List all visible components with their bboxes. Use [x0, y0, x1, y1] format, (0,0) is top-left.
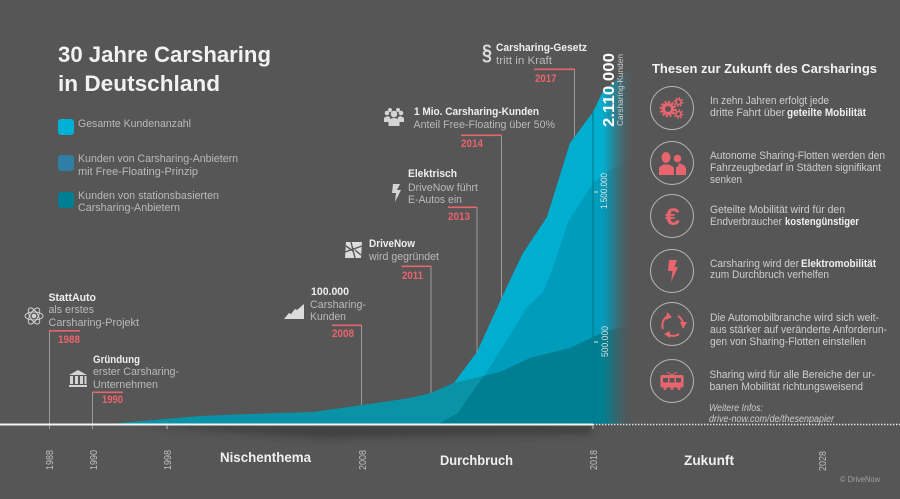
- axis years: [45, 450, 829, 471]
- y axis value: 1.500.000: 1.500.000: [599, 173, 609, 209]
- fade into future: [602, 50, 632, 425]
- event 1988: StattAuto: [48, 292, 96, 304]
- title: [58, 42, 271, 96]
- legend: free-floating customers: [58, 153, 238, 178]
- icon: train: [660, 372, 684, 390]
- thesis 3: Endverbraucher: [710, 216, 782, 228]
- area: station-based customers: [110, 325, 645, 424]
- event 2008: [284, 286, 366, 340]
- area: free-floating customers: [438, 155, 645, 424]
- y axis value: total: Carsharing-Kunden: [615, 54, 625, 126]
- event 2017: 2017: [535, 73, 556, 85]
- copyright: © DriveNow: [840, 475, 880, 484]
- legend: free-floating customers: Kunden von Carsharing-Anbietern: [78, 153, 238, 165]
- thesis 3: Geteilte Mobilität wird für den: [710, 204, 845, 216]
- event 1988: Carsharing-Projekt: [48, 317, 139, 329]
- thesis 1: [650, 86, 866, 130]
- legend: [58, 118, 238, 214]
- axis years: 2008: [358, 450, 369, 470]
- event 2017: tritt in Kraft: [496, 55, 552, 67]
- icon: atom: [25, 306, 43, 326]
- legend: total customers: Gesamte Kundenanzahl: [78, 118, 191, 130]
- thesis 2: [650, 142, 885, 186]
- area: station-based overlap: [440, 328, 617, 424]
- area chart: [116, 72, 628, 424]
- event 1990: [69, 354, 179, 406]
- event 2013: Elektrisch: [408, 168, 457, 180]
- thesis 1: geteilte Mobilität: [787, 107, 866, 119]
- event 2014: [384, 106, 555, 150]
- event 2011: [345, 238, 439, 282]
- axis years: 1998: [163, 450, 174, 470]
- thesis 2: Autonome Sharing-Flotten werden den: [710, 150, 885, 162]
- y axis value: 500.000: [594, 326, 610, 357]
- event 2008: 100.000: [311, 286, 349, 298]
- theses panel: [650, 61, 887, 425]
- icon: circular arrows: [662, 312, 687, 338]
- event 2011: DriveNow: [369, 238, 415, 250]
- thesis 6: banen Mobilität richtungsweisend: [710, 381, 863, 393]
- thesis 4: Carsharing wird der: [710, 258, 799, 270]
- event 2008: 2008: [332, 328, 354, 340]
- thesis 3: [650, 194, 860, 238]
- phase labels: Durchbruch: [440, 452, 513, 468]
- axis years: 1988: [45, 450, 56, 470]
- event 2014: Anteil Free-Floating über 50%: [414, 119, 555, 131]
- axis line: [0, 424, 900, 429]
- thesis 5: aus stärker auf veränderte Anforderun-: [710, 324, 887, 336]
- icon: growth mountains: [284, 304, 304, 319]
- icon: lightning bolt: [392, 184, 401, 202]
- legend: station-based customers: [58, 190, 219, 214]
- event 1990: Unternehmen: [93, 379, 158, 391]
- y axis value: total: 2.110.000: [601, 53, 618, 127]
- further info link: Weitere Infos:: [709, 403, 763, 414]
- thesis 4: [650, 250, 876, 292]
- axis years: 2018: [589, 450, 600, 470]
- event 1988: [25, 292, 139, 346]
- title: 30 Jahre Carsharing: [58, 42, 271, 67]
- icon: DriveNow map: [345, 242, 362, 258]
- event 2011: wird gegründet: [368, 251, 439, 263]
- event 2008: Carsharing-: [310, 299, 366, 311]
- area: total customers: [431, 60, 645, 424]
- thesis 5: Die Automobilbranche wird sich weit-: [710, 312, 879, 324]
- event 2011: 2011: [402, 270, 423, 282]
- y axis value: 1.500.000: [594, 173, 609, 209]
- theses heading: Thesen zur Zukunft des Carsharings: [652, 61, 877, 76]
- icon: euro: €: [665, 204, 680, 231]
- event 1990: 1990: [102, 394, 123, 406]
- event 2013: E-Autos ein: [408, 194, 462, 206]
- event 1988: 1988: [58, 334, 80, 346]
- legend: free-floating customers: mit Free-Floating-Prinzip: [78, 166, 198, 178]
- 2018 marker line: [592, 112, 594, 424]
- legend: total customers: [58, 118, 191, 135]
- thesis 4: zum Durchbruch verhelfen: [710, 269, 829, 281]
- thesis 6: [650, 360, 875, 402]
- axis years: 2028: [818, 451, 829, 471]
- thesis 1: dritte Fahrt über: [710, 107, 785, 119]
- event stems: [50, 69, 574, 429]
- legend: station-based customers: Kunden von stationsbasierten: [78, 190, 219, 202]
- axis years: 1990: [89, 450, 100, 470]
- icon: lightning bolt: [668, 260, 678, 282]
- thesis 6: Sharing wird für alle Bereiche der ur-: [710, 369, 875, 381]
- further info link: drive-now.com/de/thesenpapier: [709, 414, 835, 425]
- event 1990: erster Carsharing-: [93, 366, 179, 378]
- thesis 5: gen von Sharing-Flotten einstellen: [710, 336, 866, 348]
- thesis 5: [650, 302, 887, 348]
- phase labels: [220, 449, 734, 468]
- y axis value: total: [601, 53, 625, 127]
- event 1990: Gründung: [93, 354, 140, 366]
- event 1988: als erstes: [48, 304, 94, 316]
- icon: paragraph sign: §: [482, 40, 492, 65]
- icon: institution building: [69, 370, 87, 387]
- event 2017: [482, 40, 587, 85]
- icon: two people: [659, 152, 686, 175]
- baseline shadow: [180, 426, 592, 439]
- icon: group of people: [384, 108, 404, 126]
- further info link: [709, 403, 835, 425]
- thesis 4: Elektromobilität: [801, 258, 876, 270]
- event 2017: Carsharing-Gesetz: [496, 42, 587, 54]
- icon: gears: [661, 98, 682, 118]
- event 2013: [392, 168, 478, 223]
- event 2008: Kunden: [310, 311, 346, 323]
- title: in Deutschland: [58, 71, 220, 96]
- event 2013: DriveNow führt: [408, 182, 478, 194]
- event 2014: 2014: [461, 138, 484, 150]
- phase labels: Nischenthema: [220, 449, 311, 465]
- thesis 1: In zehn Jahren erfolgt jede: [710, 95, 829, 107]
- y axis value: 500.000: 500.000: [600, 326, 610, 357]
- event 2013: 2013: [448, 211, 470, 223]
- event 2014: 1 Mio. Carsharing-Kunden: [414, 106, 539, 118]
- thesis 2: Fahrzeugbedarf in Städten signifikant: [710, 162, 881, 174]
- thesis 2: senken: [710, 174, 742, 186]
- legend: station-based customers: Carsharing-Anbietern: [78, 202, 180, 214]
- phase labels: Zukunft: [684, 452, 734, 468]
- thesis 3: kostengünstiger: [785, 216, 860, 228]
